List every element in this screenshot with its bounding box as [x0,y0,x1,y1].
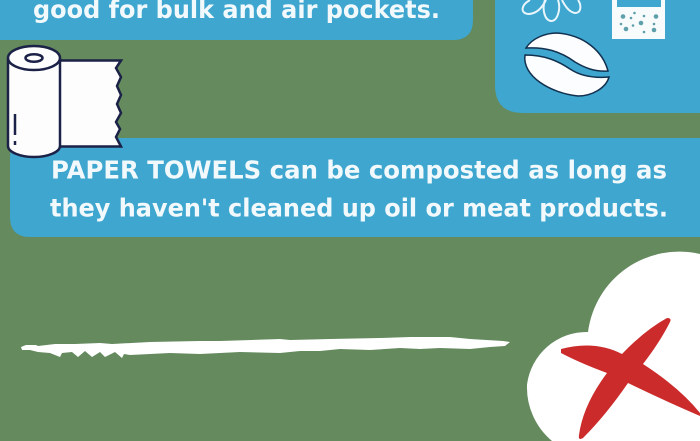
text: paper towels: PAPER TOWELS can be composted as long as [51,156,667,184]
icon: coffee bean [525,33,609,96]
text: paper towels: they haven't cleaned up oil or meat products. [50,194,668,222]
panel: compost items [495,0,700,113]
icon: flower [523,0,580,21]
text: paper towels [50,156,668,222]
icon: paper towel roll [8,46,121,157]
icon: white cloud with red cross [527,252,700,441]
panel: paper towels note [10,138,700,237]
red cross mark [561,318,700,439]
icon: baking soda box [612,0,665,39]
panel: top text banner [0,0,473,40]
decorative brush stroke [21,337,510,358]
